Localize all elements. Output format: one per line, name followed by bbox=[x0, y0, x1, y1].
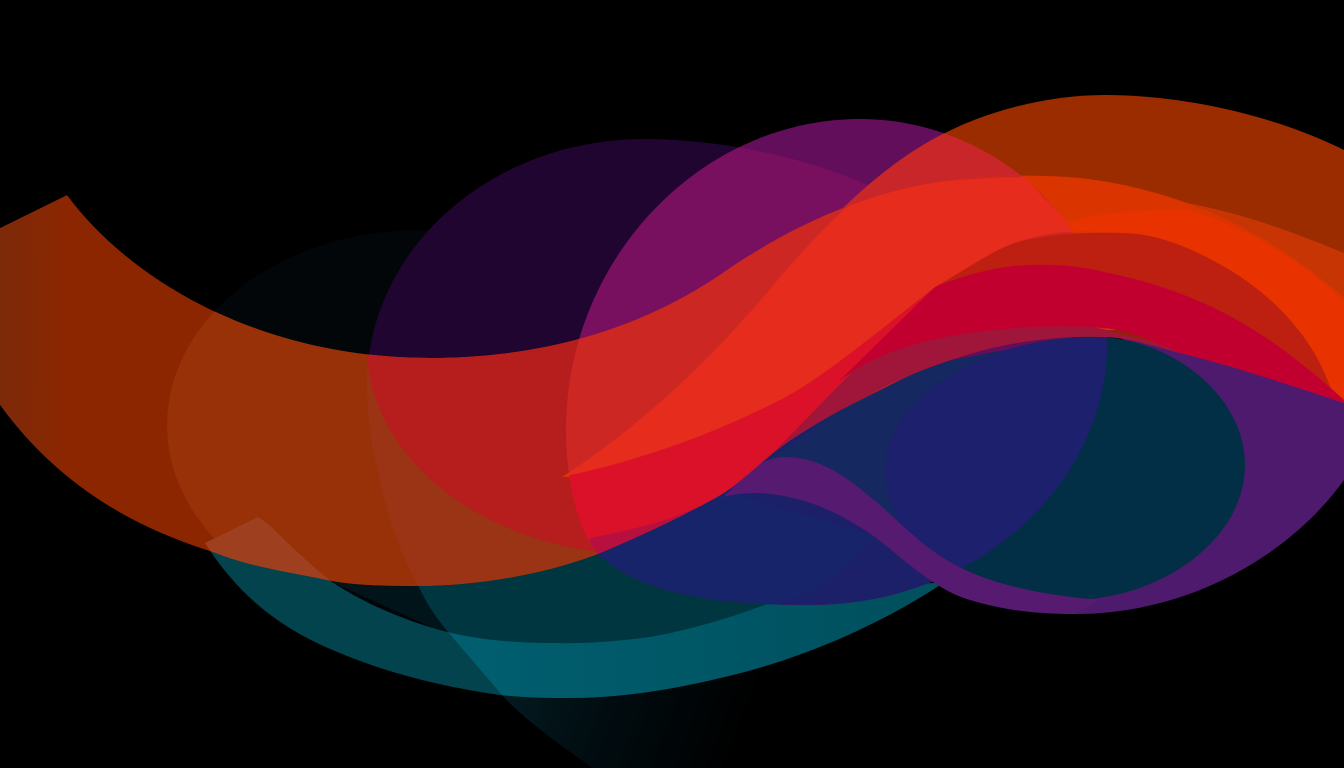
purple blob at lower right bbox=[973, 330, 1344, 614]
dark pool under the band bbox=[300, 555, 470, 645]
teal swoosh bbox=[210, 551, 939, 698]
main orange band bbox=[0, 176, 1344, 586]
band through red ellipse bbox=[367, 208, 921, 552]
band through large circle bbox=[367, 208, 844, 586]
orange circle top right bbox=[843, 95, 1344, 406]
band through purple circle bbox=[566, 176, 1107, 554]
band through orange circle bbox=[562, 176, 1344, 478]
swoosh tip through band bbox=[205, 517, 330, 581]
crimson ribbon bbox=[838, 265, 1344, 403]
bright orange right region bbox=[1068, 210, 1344, 410]
muted crimson band bbox=[773, 287, 1344, 453]
large dark violet circle bbox=[360, 139, 920, 768]
band through faint ellipse bbox=[167, 312, 634, 586]
teal ellipse bbox=[885, 337, 1245, 599]
purple wavy strip bbox=[723, 457, 1100, 614]
darker orange wedge bbox=[1187, 203, 1344, 300]
muted crimson sliver bbox=[590, 503, 706, 554]
navy lower part of purple circle bbox=[598, 336, 1107, 605]
dark red arc region bbox=[935, 233, 1344, 407]
purple circle bbox=[579, 119, 1073, 605]
darker navy upper area bbox=[768, 336, 1086, 524]
red wedge under bright swoosh bbox=[569, 289, 932, 554]
faint dark ellipse at left bbox=[167, 230, 673, 620]
bright orange-red central swoosh bbox=[562, 177, 1072, 477]
darker navy lower area bbox=[598, 554, 778, 604]
